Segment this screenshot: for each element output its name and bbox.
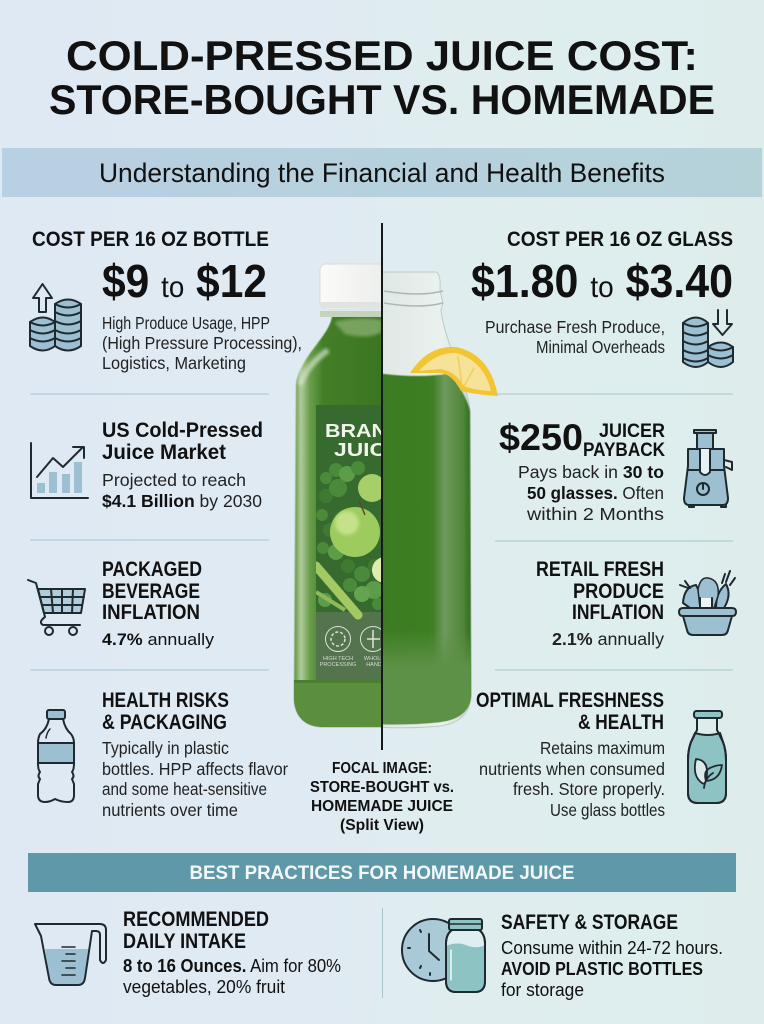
product label: HIGH TECH xyxy=(323,656,353,662)
description: Logistics, Marketing xyxy=(102,353,246,373)
panel: packaged inflation: INFLATION xyxy=(102,601,200,624)
focal image caption: (Split View) xyxy=(340,817,424,834)
focal image caption: HOMEMADE JUICE xyxy=(311,798,453,815)
panel: optimal freshness: & HEALTH xyxy=(578,711,664,734)
product label: BRAN xyxy=(325,421,387,441)
product label: WHOLE xyxy=(364,656,384,662)
panel: cost per glass: COST PER 16 OZ GLASS xyxy=(507,228,733,251)
best practices banner xyxy=(28,853,736,892)
panel: juicer payback: within 2 Months xyxy=(526,504,664,524)
panel: health risks: Typically in plastic xyxy=(102,738,229,758)
panel: health risks: & PACKAGING xyxy=(102,711,227,734)
panel: optimal freshness: OPTIMAL FRESHNESS xyxy=(476,689,664,712)
panel: cost per glass xyxy=(471,228,733,367)
panel: health risks: bottles. HPP affects flavor xyxy=(102,759,288,779)
panel: market: $4.1 Billion by 2030 xyxy=(102,491,262,511)
panel: juicer payback: $250 xyxy=(499,417,583,458)
panel: safety and storage: AVOID PLASTIC BOTTLES xyxy=(501,958,703,979)
panel: safety and storage: SAFETY & STORAGE xyxy=(501,911,678,934)
panel: optimal freshness: fresh. Store properly. xyxy=(513,779,665,799)
icon: coins up xyxy=(30,284,81,350)
vertical divider xyxy=(382,908,383,998)
panel: juicer payback: Pays back in 30 to xyxy=(518,462,664,482)
label produce xyxy=(316,461,384,610)
panel: market xyxy=(31,419,263,511)
panel: recommended daily intake: DAILY INTAKE xyxy=(123,930,246,953)
panel: packaged inflation: BEVERAGE xyxy=(102,580,200,603)
panel: market: Juice Market xyxy=(102,441,226,464)
icon: juicer xyxy=(684,430,732,507)
panel: optimal freshness: Use glass bottles xyxy=(550,800,665,820)
section dividers xyxy=(30,394,733,670)
panel: optimal freshness: Retains maximum xyxy=(540,738,665,758)
panel: cost per bottle xyxy=(30,228,302,373)
title xyxy=(49,32,715,123)
panel: health risks: and some heat-sensitive xyxy=(102,779,267,799)
panel: market: US Cold-Pressed xyxy=(102,419,263,442)
panel: recommended daily intake: vegetables, 20% fruit xyxy=(123,976,285,997)
description: Purchase Fresh Produce, xyxy=(485,317,665,337)
homemade glass bottle, right half xyxy=(376,272,498,728)
focal image caption: FOCAL IMAGE: xyxy=(332,760,432,777)
product label: HAND xyxy=(366,662,382,668)
panel: packaged inflation: 4.7% annually xyxy=(102,630,215,649)
description: (High Pressure Processing), xyxy=(102,333,302,353)
icon: measuring cup xyxy=(35,924,106,985)
panel: safety and storage: Consume within 24-72 hours. xyxy=(501,937,723,958)
icon: shopping cart xyxy=(28,580,85,635)
panel: safety and storage xyxy=(402,911,723,1000)
subtitle band xyxy=(2,148,762,197)
panel: recommended daily intake xyxy=(35,908,341,997)
icon: plastic bottle xyxy=(38,710,74,802)
product label: PROCESSING xyxy=(320,662,356,668)
panel: optimal freshness: nutrients when consumed xyxy=(479,759,665,779)
panel: packaged inflation: PACKAGED xyxy=(102,558,202,581)
panel: optimal freshness xyxy=(476,689,726,820)
lemon slice xyxy=(410,347,498,396)
panel: retail inflation: PRODUCE xyxy=(573,580,664,603)
product label xyxy=(316,405,381,680)
description xyxy=(485,317,665,357)
panel: retail inflation xyxy=(536,558,736,649)
description xyxy=(102,313,302,373)
panel: health risks xyxy=(38,689,288,820)
panel: recommended daily intake: RECOMMENDED xyxy=(123,908,269,931)
price: $1.80 to $3.40 xyxy=(471,255,733,307)
icon: clock and jar xyxy=(402,919,485,992)
focal image caption xyxy=(310,760,454,834)
description: Minimal Overheads xyxy=(536,337,665,357)
panel: recommended daily intake: 8 to 16 Ounces. Aim for 80% xyxy=(123,955,341,976)
icon: glass bottle with leaf xyxy=(688,711,726,803)
icon: produce basket xyxy=(679,571,736,635)
icon: coins down xyxy=(683,310,733,367)
panel: juicer payback: JUICER xyxy=(599,421,665,442)
panel: health risks: HEALTH RISKS xyxy=(102,689,229,712)
icon: growth chart xyxy=(31,443,88,498)
title: STORE-BOUGHT VS. HOMEMADE xyxy=(49,76,715,123)
best practices banner: BEST PRACTICES FOR HOMEMADE JUICE xyxy=(190,863,574,884)
description: High Produce Usage, HPP xyxy=(102,313,270,333)
panel: cost per bottle: COST PER 16 OZ BOTTLE xyxy=(32,228,269,251)
focal image: split bottle xyxy=(294,223,498,750)
panel: packaged inflation xyxy=(28,558,215,649)
panel: juicer payback: 50 glasses. Often xyxy=(527,483,664,503)
store-bought bottle, left half xyxy=(293,264,381,728)
panel: juicer payback xyxy=(499,417,732,524)
panel: juicer payback: PAYBACK xyxy=(583,440,665,461)
center split line xyxy=(381,223,383,750)
panel: health risks: nutrients over time xyxy=(102,800,238,820)
panel: retail inflation: INFLATION xyxy=(572,601,664,624)
title: COLD-PRESSED JUICE COST: xyxy=(66,32,698,79)
subtitle band: Understanding the Financial and Health Benefits xyxy=(99,158,665,188)
price: $9 to $12 xyxy=(102,255,267,307)
panel: retail inflation: RETAIL FRESH xyxy=(536,558,664,581)
panel: retail inflation: 2.1% annually xyxy=(552,629,664,649)
product label: JUIC xyxy=(334,440,386,460)
panel: market: Projected to reach xyxy=(102,470,246,490)
focal image caption: STORE-BOUGHT vs. xyxy=(310,779,454,796)
panel: safety and storage: for storage xyxy=(501,979,584,1000)
